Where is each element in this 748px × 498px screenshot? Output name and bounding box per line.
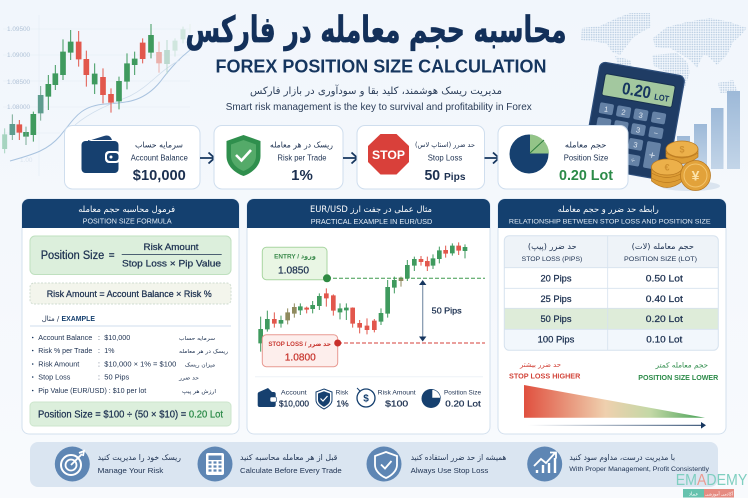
coins illustration: $ [679,144,685,154]
calculator illustration: 3 [635,125,641,135]
summary: account [258,388,309,408]
table [504,236,718,350]
background candlestick chart: 1.08500 [7,79,31,86]
example rows: 1% [104,348,114,355]
panel header: POSITION SIZE FORMULA [83,218,172,226]
tip: manage risk: Manage Your Risk [98,466,164,475]
logo: Emademy watermark: آکادمی آموزشی [705,492,734,498]
risk amount box: Risk Amount = Account Balance × Risk % [47,289,212,299]
panel: practical example [247,199,490,434]
icon: pie chart [510,134,549,174]
subtitle: English: Smart risk management is the key to survival and profitability in Forex [226,101,532,113]
background candlestick chart: 1.09500 [7,26,31,33]
summary: position size: Position Size [444,390,481,396]
calculator illustration: − [656,114,662,123]
bar chart decoration [677,91,740,169]
card: account balance: $10,000 [133,167,186,184]
label: stop loss higher: STOP LOSS HIGHER [509,372,581,381]
summary: risk amount: $ [363,394,369,404]
label: position size lower [638,362,719,382]
card: stop loss [357,126,484,189]
card: stop loss: حد ضرر (استاپ لاس) [415,141,475,149]
card: stop loss: 50 Pips [424,168,466,184]
gradient wedge [524,385,705,418]
card: position size: 0.20 Lot [559,168,613,184]
example rows: Risk Amount [38,362,79,368]
summary: risk: 1% [336,398,349,408]
panel header: فرمول محاسبه حجم معامله [78,205,175,215]
example rows [32,335,228,395]
panel header [247,199,490,228]
panel header [498,199,726,228]
example rows: Pip Value (EUR/USD) : $10 per lot [38,388,146,395]
entry callout [262,247,331,282]
50 pips arrow: 50 Pips [432,306,462,316]
background candlestick chart: 1.09000 [7,52,31,59]
table: حجم معامله (لات) [632,242,694,251]
formula box: Stop Loss × Pip Value [122,258,221,270]
result box: Position Size = $100 ÷ (50 × $10) = 0.20 Lot [38,410,223,420]
tip: manage risk [55,446,181,482]
example rows: : [98,374,100,382]
label: stop loss higher: حد ضرر بیشتر [519,361,561,369]
example rows: $10,000 × 1% = $100 [104,362,176,368]
example rows: حد ضرر [178,376,199,382]
card: risk per trade: Risk per Trade [278,154,326,162]
table: 100 Pips [538,334,575,346]
stop loss callout: 1.0800 [285,352,316,364]
card: risk per trade: ریسک در هر معامله [270,140,333,150]
subtitle: Persian: مدیریت ریسک هوشمند، کلید بقا و سودآوری در بازار فارکس [250,84,502,97]
stop loss callout: STOP LOSS / حد ضرر [268,341,331,348]
tip: calculate [198,446,342,482]
title: English: FOREX POSITION SIZE CALCULATION [216,56,546,76]
stop loss callout [262,335,341,367]
arrow [484,152,499,164]
calculator illustration: 3 [633,140,638,150]
formula box: = [109,250,115,262]
panel header [22,199,239,228]
label: position size lower: POSITION SIZE LOWER [638,373,719,382]
table: 0.20 Lot [646,314,683,325]
logo: Emademy watermark: عماد [689,492,698,498]
label: stop loss higher [509,361,581,381]
tip: use stop loss: Always Use Stop Loss [411,466,489,475]
tip: profit consistently [527,446,710,482]
table: 50 Pips [540,314,572,325]
tip: calculate: قبل از هر معامله محاسبه کنید [240,453,338,462]
icon: wallet [82,136,120,173]
example heading: مثال / EXAMPLE [42,315,95,323]
card: position size: حجم معامله [565,140,607,150]
summary: risk: Risk [336,390,349,396]
summary: account: Account [281,390,307,396]
title: Persian: محاسبه حجم معامله در فارکس [186,10,566,51]
entry callout: ENTRY / ورود [274,254,316,260]
example rows: ارزش هر پیپ [182,389,217,395]
tip: manage risk: ریسک خود را مدیریت کنید [98,453,181,462]
panel: position size formula [22,199,239,434]
candlestick chart [261,242,465,352]
card: stop loss: Stop Loss [428,154,462,162]
card: account balance [64,126,200,189]
example rows: سرمایه حساب [179,336,215,342]
example rows: Risk % per Trade [38,348,92,355]
card: position size [498,126,628,189]
result box [30,402,231,426]
table: 0.10 Lot [646,334,683,346]
formula box: Position Size [41,250,104,262]
panel header: PRACTICAL EXAMPLE IN EUR/USD [311,219,432,226]
tip: profit consistently: با مدیریت درست، مداوم سود کنید [569,453,675,462]
summary: position size [422,389,481,408]
card: position size: Position Size [564,154,608,162]
bottom tips strip [30,442,718,487]
example rows: ریسک در هر معامله [179,348,228,355]
tip: use stop loss [366,446,506,482]
example rows: $10,000 [104,335,130,342]
background candlestick chart [3,15,190,176]
formula box [30,236,231,274]
calculator illustration: ÷ [630,155,636,165]
tip: profit consistently: With Proper Management, Profit Consistently [569,466,710,473]
summary: account: $10,000 [279,398,309,408]
50 pips arrow [419,280,462,342]
coins illustration: € [664,162,670,172]
card: account balance: Account Balance [131,154,188,162]
stop loss line [338,342,485,344]
summary: risk amount: Risk Amount [378,390,416,396]
panel: relationship table [498,199,726,434]
example rows: : [98,362,100,368]
coins illustration: ¥ [692,168,700,184]
calculator illustration: 1 [603,104,609,114]
entry callout: 1.0850 [278,264,309,276]
table: 25 Pips [540,294,572,305]
icon: stop sign: STOP [372,148,405,162]
example rows: : [98,348,100,355]
world map dots [581,13,747,93]
table: 20 Pips [540,274,572,284]
card: account balance: سرمایه حساب [135,140,183,150]
calculator illustration: 2 [621,107,626,117]
summary: risk amount [357,388,416,408]
panel header: RELATIONSHIP BETWEEN STOP LOSS AND POSITION SIZE [509,218,711,226]
direction arrow [528,422,706,429]
formula box: Risk Amount [144,242,199,253]
summary: risk amount: $100 [385,398,409,408]
coins illustration [652,141,720,191]
panel header: رابطه حد ضرر و حجم معامله [558,205,659,215]
panel header: مثال عملی در جفت ارز EUR/USD [310,205,432,215]
table: POSITION SIZE (LOT) [624,256,697,263]
card: risk per trade [214,126,343,189]
table: حد ضرر (پیپ) [528,242,577,251]
arrow [200,152,214,164]
entry line [327,277,485,279]
calculator illustration: 3 [638,111,644,120]
risk amount box [30,283,231,304]
arrow [343,152,358,164]
summary: position size: 0.20 Lot [445,398,481,408]
tip: calculate: Calculate Before Every Trade [240,466,342,475]
label: position size lower: حجم معامله کمتر [655,362,708,370]
calculator illustration: − [653,128,659,138]
table: STOP LOSS (PIPS) [522,256,582,263]
calculator illustration: 0.20 LOT [621,79,672,106]
background candlestick chart: 1.00 [20,157,33,164]
example rows: : [98,335,100,342]
logo: Emademy watermark [676,472,748,498]
icon: shield [226,135,260,176]
table: 0.40 Lot [646,294,683,305]
summary: risk [316,389,349,409]
card: risk per trade: 1% [291,167,313,184]
example rows: 50 Pips [104,374,130,382]
tip: use stop loss: همیشه از حد ضرر استفاده کنید [411,453,506,462]
example rows: Stop Loss [38,374,71,382]
example rows: Account Balance [38,335,92,342]
calculator illustration: + [648,149,656,162]
table: 0.50 Lot [646,274,683,284]
example rows: میزان ریسک [185,362,215,368]
calculator illustration [582,62,685,181]
background candlestick chart: 1.08000 [7,104,31,111]
